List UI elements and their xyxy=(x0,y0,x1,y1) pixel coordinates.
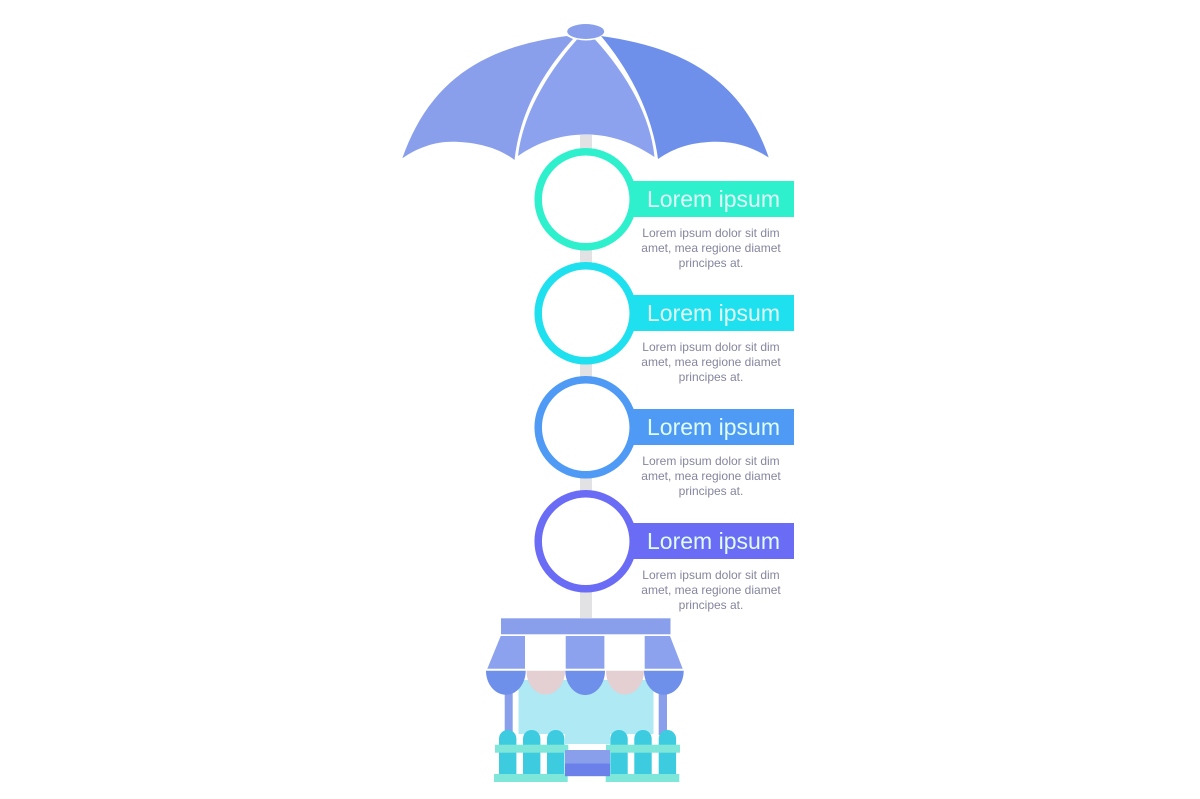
step 3 text: Lorem ipsum dolor sit dim xyxy=(642,454,780,468)
step 2 text: principes at. xyxy=(679,370,743,384)
left post xyxy=(505,690,513,735)
step 2 xyxy=(538,266,794,384)
step 1 heading: Lorem ipsum xyxy=(647,186,780,212)
step 2 heading: Lorem ipsum xyxy=(647,300,780,326)
step 2 ring xyxy=(538,266,633,361)
step 3 ring xyxy=(538,380,633,475)
step 1 text xyxy=(641,226,781,270)
step 4 text: amet, mea regione diamet xyxy=(641,583,781,597)
fence rails xyxy=(494,745,680,782)
step 4 text: Lorem ipsum dolor sit dim xyxy=(642,568,780,582)
step 2 text: Lorem ipsum dolor sit dim xyxy=(642,340,780,354)
umbrella centre panel xyxy=(518,40,654,157)
step 3 xyxy=(538,380,794,498)
step 1 xyxy=(538,152,794,270)
roof bar xyxy=(501,618,670,634)
step 2 text: amet, mea regione diamet xyxy=(641,355,781,369)
step 1 ring xyxy=(538,152,633,247)
step 4 banner xyxy=(625,523,794,559)
step 3 text: amet, mea regione diamet xyxy=(641,469,781,483)
step 3 text: principes at. xyxy=(679,484,743,498)
shop window xyxy=(518,680,654,744)
step 1 text: amet, mea regione diamet xyxy=(641,241,781,255)
step 4 text xyxy=(641,568,781,612)
step 4 ring xyxy=(538,494,633,589)
step 4 text: principes at. xyxy=(679,598,743,612)
step 1 text: principes at. xyxy=(679,256,743,270)
umbrella right panel xyxy=(601,36,769,159)
step 2 text xyxy=(641,340,781,384)
icon: storefront xyxy=(486,618,684,782)
step 1 text: Lorem ipsum dolor sit dim xyxy=(642,226,780,240)
step 3 text xyxy=(641,454,781,498)
right post xyxy=(659,690,667,735)
fence pickets xyxy=(499,730,676,774)
pole xyxy=(580,135,592,618)
awning stripes xyxy=(487,636,683,669)
awning scallops xyxy=(486,671,684,695)
door steps xyxy=(565,750,610,776)
step 4 heading: Lorem ipsum xyxy=(647,528,780,554)
step 3 banner xyxy=(625,409,794,445)
step 2 banner xyxy=(625,295,794,331)
step 1 banner xyxy=(625,181,794,217)
umbrella left panel xyxy=(402,36,573,160)
step 3 heading: Lorem ipsum xyxy=(647,414,780,440)
icon: umbrella xyxy=(402,24,769,160)
step 4 xyxy=(538,494,794,612)
umbrella top cap xyxy=(567,24,604,39)
